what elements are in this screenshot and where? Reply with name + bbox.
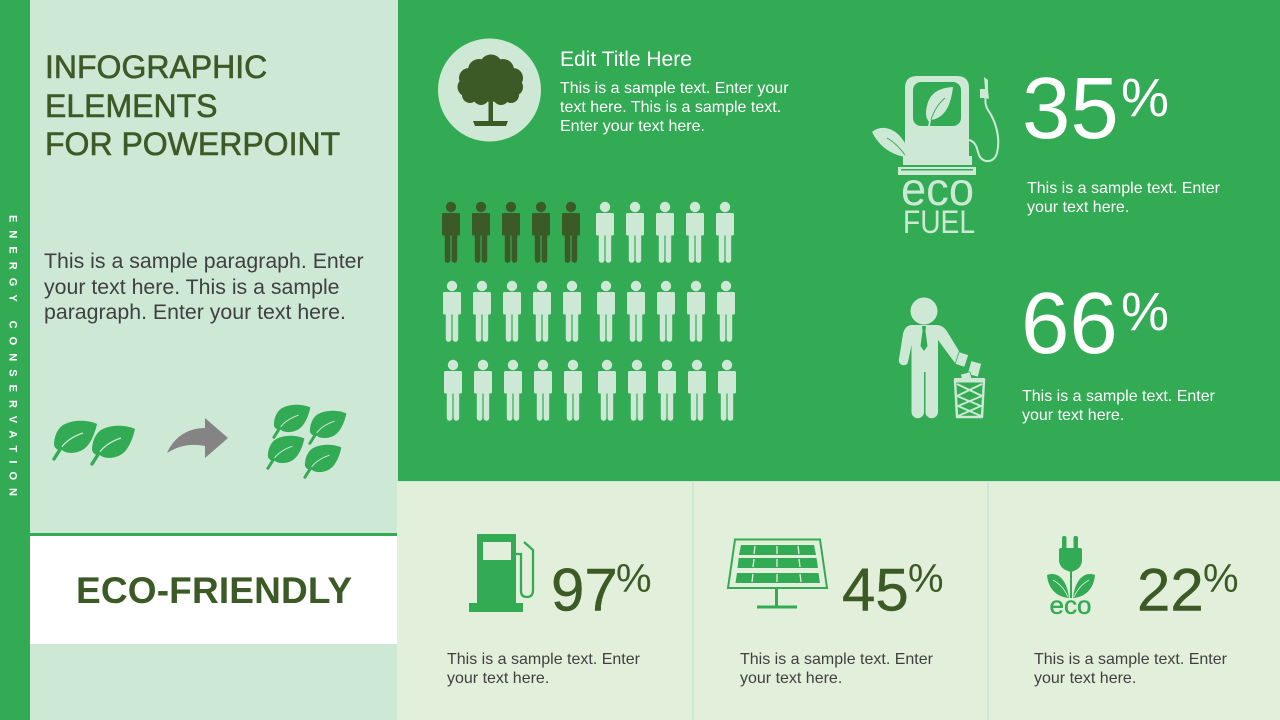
text block: edit title: Edit Title Here	[560, 48, 692, 71]
icon: tree in circle	[438, 38, 541, 142]
text block: stat 97	[447, 651, 641, 687]
title: ELEMENTS	[45, 88, 217, 124]
icon: eco fuel pump: FUEL	[903, 204, 975, 240]
icon: man with recycling bin	[899, 298, 985, 418]
text block: stat 35	[1027, 180, 1221, 216]
stat: 22 percent: %	[1203, 557, 1239, 601]
text block: stat 66	[1022, 388, 1216, 424]
text block: stat 45: your text here.	[740, 670, 842, 687]
banner: eco-friendly	[30, 533, 397, 644]
text block: stat 66: This is a sample text. Enter	[1022, 388, 1216, 405]
text block: stat 22: This is a sample text. Enter	[1034, 651, 1228, 668]
stat: 35 percent: %	[1121, 68, 1169, 128]
icon: fuel pump	[469, 534, 533, 612]
text block: edit title: Enter your text here.	[560, 118, 705, 135]
banner: eco-friendly: ECO-FRIENDLY	[76, 570, 352, 611]
stat: 45 percent	[842, 556, 944, 624]
text block: stat 22: your text here.	[1034, 670, 1136, 687]
paragraph: This is a sample paragraph. Enter	[44, 249, 364, 273]
sidebar: energy conservation	[0, 0, 30, 720]
paragraph	[44, 249, 364, 324]
text block: stat 22	[1034, 651, 1228, 687]
text block: stat 97: This is a sample text. Enter	[447, 651, 641, 668]
icon: four leaves	[268, 405, 346, 477]
stat: 22 percent: 22	[1137, 556, 1204, 624]
text block: edit title: text here. This is a sample text.	[560, 99, 781, 116]
text block: stat 97: your text here.	[447, 670, 549, 687]
stat: 35 percent: 35	[1022, 60, 1119, 157]
panel: bottom row background	[397, 482, 1280, 720]
text block: stat 45	[740, 651, 934, 687]
icon: eco plug plant	[1047, 536, 1095, 620]
paragraph: paragraph. Enter your text here.	[44, 300, 346, 324]
icon: eco fuel pump: eco	[901, 163, 974, 215]
stat: 45 percent: 45	[842, 556, 909, 624]
stat: 45 percent: %	[908, 557, 944, 601]
icon: two leaves	[54, 421, 135, 464]
stat: 22 percent	[1137, 556, 1239, 624]
stat: 97 percent: %	[616, 557, 652, 601]
sidebar: energy conservation: ENERGY CONSERVATION	[6, 215, 18, 496]
text block: stat 45: This is a sample text. Enter	[740, 651, 934, 668]
chart: people pictogram	[442, 202, 736, 421]
text block: edit title: This is a sample text. Enter your	[560, 80, 789, 97]
stat: 66 percent	[1021, 275, 1169, 372]
text block: stat 35: your text here.	[1027, 199, 1129, 216]
text block: stat 66: your text here.	[1022, 407, 1124, 424]
title: FOR POWERPOINT	[45, 126, 340, 162]
stat: 66 percent: 66	[1021, 275, 1118, 372]
paragraph: your text here. This is a sample	[44, 275, 340, 299]
stat: 35 percent	[1022, 60, 1169, 157]
icon: solar panel	[728, 540, 827, 607]
text block: edit title	[560, 48, 789, 135]
title	[45, 49, 340, 162]
panel: top green	[398, 0, 1280, 481]
stat: 66 percent: %	[1121, 282, 1169, 342]
panel: left column background	[30, 0, 398, 720]
stat: 97 percent	[551, 556, 652, 624]
title: INFOGRAPHIC	[45, 49, 267, 85]
stat: 97 percent: 97	[551, 556, 618, 624]
icon: eco plug plant: eco	[1050, 592, 1092, 620]
text block: stat 35: This is a sample text. Enter	[1027, 180, 1221, 197]
icon: eco fuel pump	[872, 76, 998, 240]
arrow	[167, 418, 228, 458]
